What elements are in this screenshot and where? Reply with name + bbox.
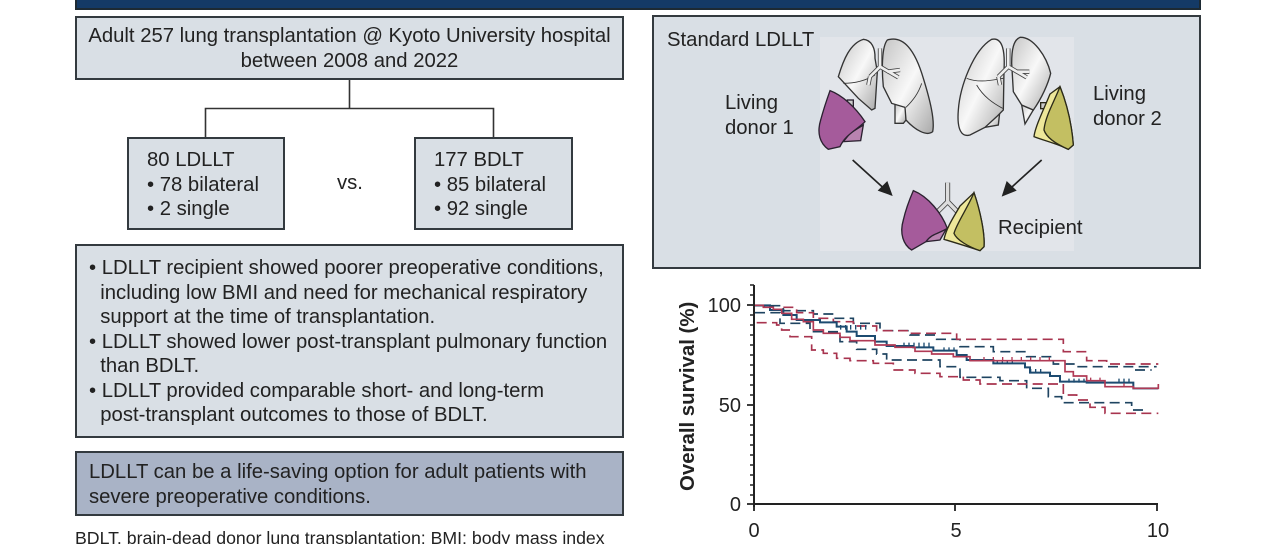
donor 2 lungs: [958, 37, 1051, 135]
findings text: support at the time of transplantation.: [100, 306, 435, 328]
panel: conclusion: [75, 451, 624, 516]
label: living donor 2: Living: [1093, 83, 1146, 105]
findings text: • LDLLT showed lower post-transplant pulmonary function: [89, 330, 607, 352]
findings text: than BDLT.: [100, 355, 199, 377]
findings text: • LDLLT provided comparable short- and long-term: [89, 380, 544, 402]
panel: standard LDLLT: [652, 15, 1201, 269]
survival curves: [755, 305, 1158, 413]
vs label: vs.: [337, 172, 363, 194]
LDLLT curve: [755, 305, 1158, 388]
LDLLT text: • 2 single: [147, 198, 230, 220]
donor 2 bronchi: [998, 48, 1029, 85]
BDLT censor ticks: [840, 327, 1132, 381]
conclusion text: severe preoperative conditions.: [89, 486, 371, 508]
findings text: including low BMI and need for mechanical respiratory: [100, 282, 587, 304]
header bar: [75, 0, 1201, 10]
y axis labels: [708, 295, 741, 516]
LDLLT text: • 78 bilateral: [147, 174, 259, 196]
cohort text: between 2008 and 2022: [241, 50, 458, 72]
y axis title: Overall survival (%): [677, 302, 699, 491]
panel: findings: [75, 244, 624, 438]
BDLT text: 177 BDLT: [434, 149, 524, 171]
x axis labels: 5: [950, 520, 962, 542]
arrow: donor 1 to recipient: [853, 160, 893, 196]
BDLT confidence bands: [755, 306, 1157, 410]
donor 1 bronchi: [868, 48, 900, 85]
x axis labels: [748, 520, 1169, 542]
label: living donor 1: Living: [725, 92, 778, 114]
LDLLT text: 80 LDLLT: [147, 149, 235, 171]
panel: cohort: [75, 16, 624, 80]
BDLT text: • 92 single: [434, 198, 528, 220]
x axis labels: 0: [748, 520, 760, 542]
label: living donor 2: donor 2: [1093, 108, 1162, 130]
LDLLT text: [147, 149, 259, 220]
y axis labels: 50: [719, 395, 741, 417]
donor lobe: purple: [819, 91, 865, 149]
label: living donor 2: [1093, 83, 1162, 130]
survival chart: [677, 284, 1169, 542]
x axis labels: 10: [1147, 520, 1169, 542]
conclusion text: [89, 461, 587, 508]
illustration: lungs: [818, 36, 1074, 252]
arrow: donor 2 to recipient: [1002, 160, 1042, 197]
conclusion text: LDLLT can be a life-saving option for adult patients with: [89, 461, 587, 483]
findings text: post-transplant outcomes to those of BDLT.: [100, 404, 488, 426]
y axis labels: 0: [730, 494, 741, 516]
BDLT text: [434, 149, 546, 220]
panel: BDLT group: [414, 137, 573, 230]
cohort text: [88, 25, 611, 72]
x axis: [753, 504, 1158, 511]
findings text: • LDLLT recipient showed poorer preoperative conditions,: [89, 257, 604, 279]
recipient lungs: [902, 183, 984, 251]
label: living donor 1: donor 1: [725, 116, 794, 138]
panel title: Standard LDLLT: [667, 29, 814, 51]
illustration background: [820, 37, 1074, 251]
panel: LDLLT group: [127, 137, 285, 230]
donor lobe: yellow: [1034, 87, 1073, 149]
y axis labels: 100: [708, 295, 741, 317]
BDLT text: • 85 bilateral: [434, 174, 546, 196]
cohort text: Adult 257 lung transplantation @ Kyoto University hospital: [88, 25, 611, 47]
connector lines: [204, 80, 494, 137]
label: recipient: Recipient: [998, 217, 1083, 239]
donor 1 lungs: [838, 39, 933, 133]
label: living donor 1: [725, 92, 794, 138]
LDLLT confidence bands: [757, 307, 1158, 413]
y axis: [747, 285, 754, 507]
findings text: [89, 257, 607, 426]
BDLT curve: [755, 305, 1158, 388]
LDLLT censor ticks: [983, 359, 1132, 385]
